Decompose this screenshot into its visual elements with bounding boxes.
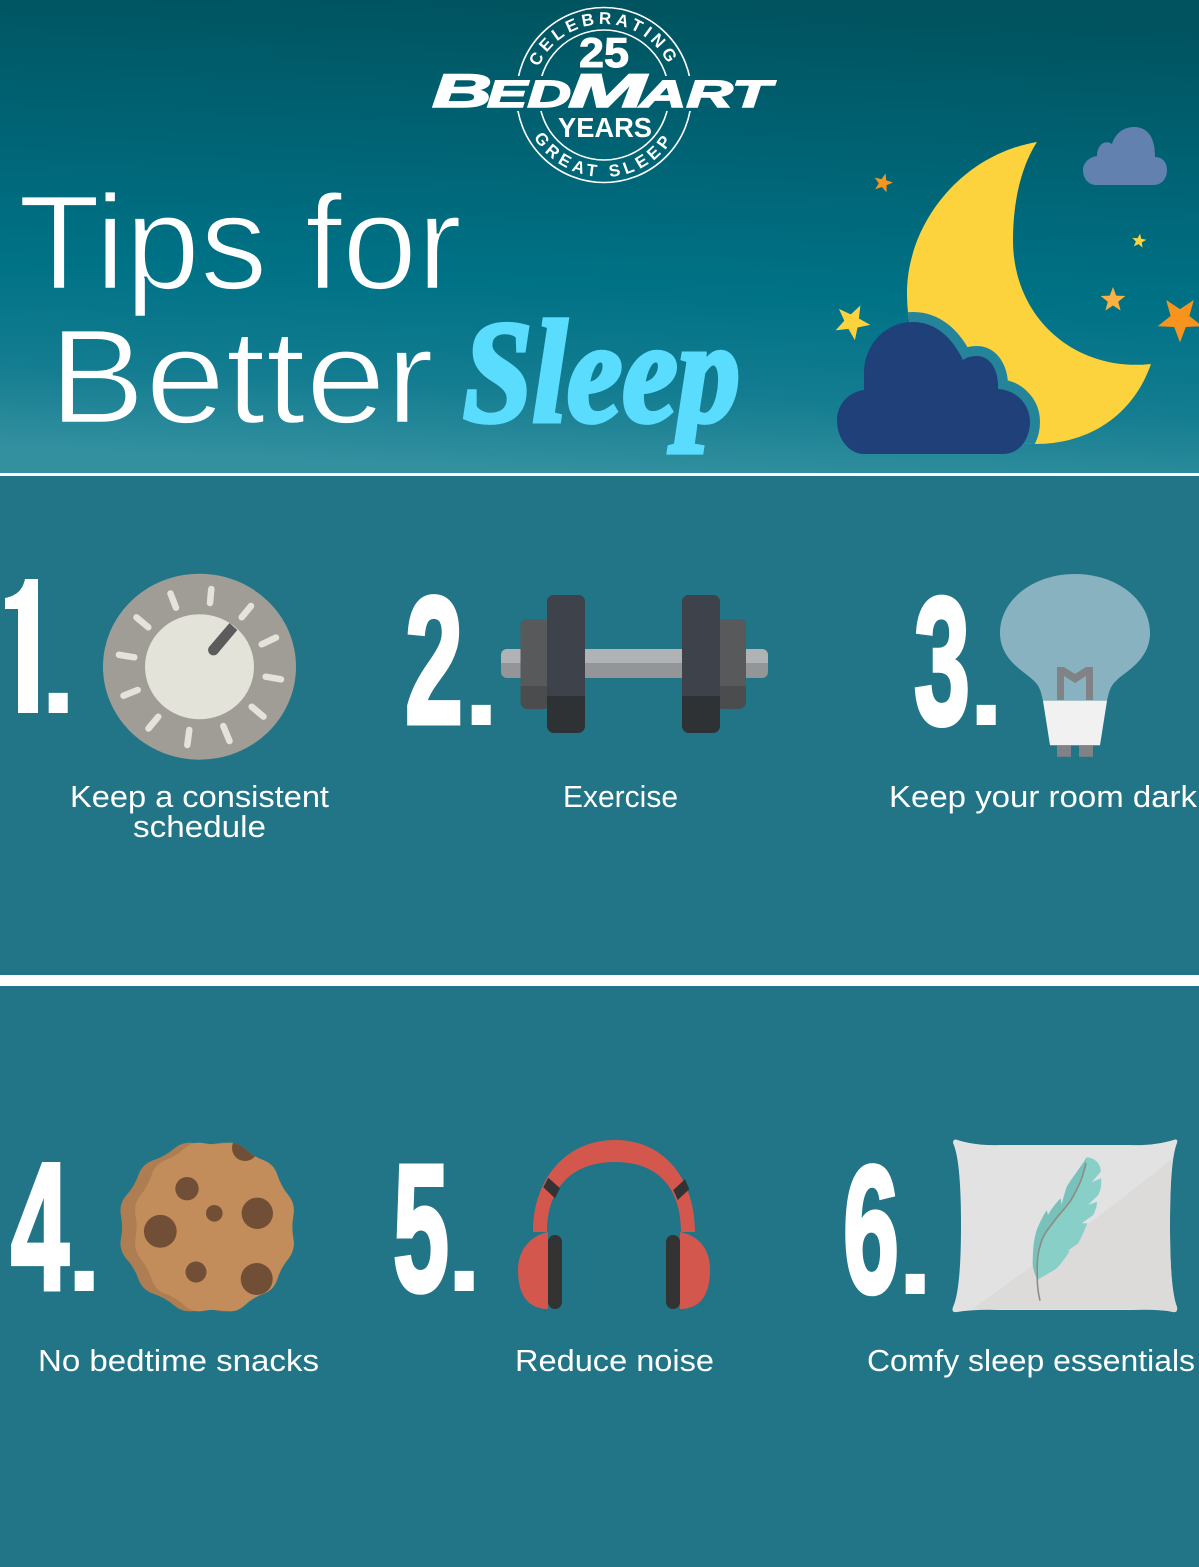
icon: crescent moon — [907, 142, 1151, 444]
number 2: 2 — [405, 560, 463, 762]
number 1: . — [40, 591, 77, 742]
title line: Tips for: Tips for — [18, 167, 462, 318]
tip 4: no bedtime snacks — [11, 1126, 319, 1378]
icon: light bulb — [1000, 574, 1150, 757]
number 2: . — [462, 603, 500, 754]
logo ring text: great sleep: GREAT SLEEP — [536, 133, 668, 176]
title line: Better: Better — [49, 301, 434, 452]
number 1: 1 — [8, 542, 45, 754]
icon: tiny yellow star — [1131, 233, 1147, 248]
icon: large navy cloud — [837, 322, 1030, 454]
number 6: 6 — [843, 1129, 899, 1331]
logo number: 25: 25 — [579, 29, 629, 76]
number 3: 3 — [914, 560, 970, 762]
tip 6: comfy sleep essentials — [843, 1129, 1195, 1378]
icon: pillow with feather — [952, 1139, 1177, 1312]
panel: header gradient — [0, 0, 1199, 473]
tip 1: keep a consistent schedule — [5, 574, 329, 838]
caption 4: No bedtime snacks — [38, 1343, 319, 1378]
logo wordmark: BedMart: ART — [638, 74, 776, 116]
tip 3: keep your room dark — [889, 560, 1198, 814]
illustration: moon, clouds and stars — [830, 127, 1199, 454]
panel: lower teal background — [0, 476, 1199, 1567]
icon: dumbbell — [501, 595, 768, 733]
number 1 — [5, 579, 68, 713]
icon: large orange star — [1158, 300, 1199, 342]
caption 1: Keep a consistent — [70, 779, 329, 814]
logo: BedMart 25 years — [432, 6, 778, 184]
number 5: . — [446, 1169, 483, 1320]
icon: headphones — [518, 1140, 710, 1309]
logo ring text: celebrating: CELEBRATING — [530, 12, 676, 64]
logo word: years: YEARS — [558, 112, 652, 143]
tip 2: exercise — [405, 560, 768, 814]
title: Tips for Better Sleep — [18, 167, 740, 453]
title word: Sleep: Sleep — [463, 291, 740, 453]
number 6: . — [896, 1172, 934, 1323]
icon: cloud outline over moon — [908, 312, 1040, 444]
caption 6: Comfy sleep essentials — [867, 1343, 1195, 1378]
logo wordmark: BedMart — [432, 64, 776, 117]
number 3: . — [968, 603, 1005, 754]
caption 5: Reduce noise — [515, 1343, 714, 1378]
number 4: . — [66, 1169, 103, 1320]
caption 1: schedule — [133, 809, 266, 844]
icon: small orange star — [872, 171, 895, 193]
caption 3: Keep your room dark — [889, 779, 1198, 814]
icon: dial clock — [103, 574, 296, 760]
logo wordmark: BedMart: B — [432, 64, 492, 117]
icon: small blue cloud — [1083, 127, 1167, 185]
caption 1 — [70, 779, 329, 844]
icon: cookie — [120, 1135, 294, 1311]
logo wordmark: BedMart: M — [568, 64, 648, 117]
icon: yellow star — [830, 298, 876, 343]
icon: light orange star — [1101, 287, 1125, 311]
tip 5: reduce noise — [393, 1128, 714, 1378]
caption 2: Exercise — [563, 779, 678, 814]
number 4: 4 — [11, 1126, 69, 1328]
number 5: 5 — [393, 1128, 449, 1330]
logo wordmark: BedMart: ED — [487, 74, 571, 116]
